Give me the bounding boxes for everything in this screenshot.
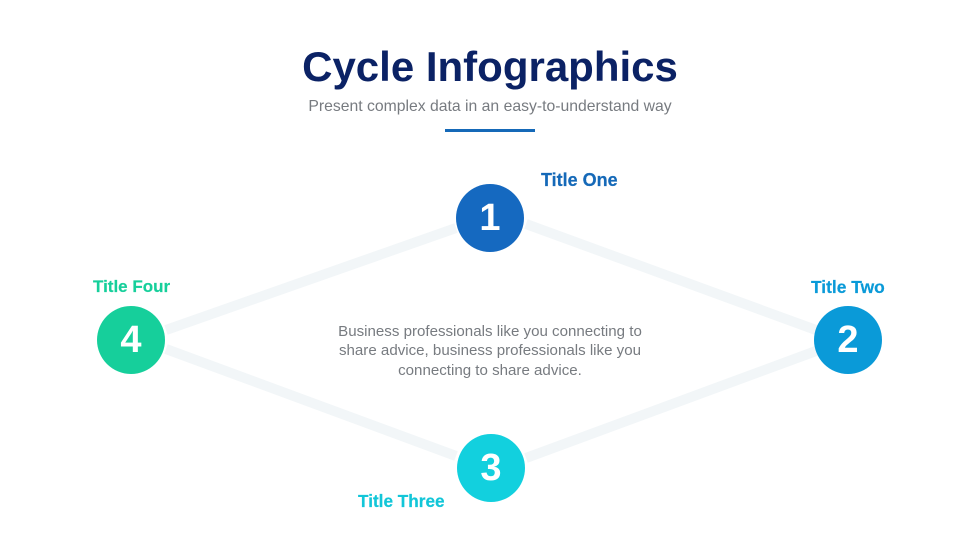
step 4 title: Title Four [93, 277, 170, 296]
step 3 title: Title Three [358, 491, 445, 511]
step 2 circle [814, 306, 882, 374]
step 2 title: Title Two [811, 277, 885, 297]
step 3 circle: 3 [480, 447, 502, 489]
step 3 circle [457, 434, 525, 502]
step 4 circle: 4 [120, 319, 142, 361]
title: Cycle Infographics [302, 42, 678, 90]
step 2 circle: 2 [837, 319, 859, 361]
step 1 circle: 1 [479, 197, 501, 239]
step 1 circle [456, 184, 524, 252]
center description text [338, 322, 642, 378]
step 4 circle [97, 306, 165, 374]
center description text: share advice, business professionals like you [339, 342, 641, 359]
step 1 title: Title One [541, 170, 618, 190]
subtitle: Present complex data in an easy-to-understand way [308, 98, 672, 115]
center description text: connecting to share advice. [398, 362, 582, 378]
center description text: Business professionals like you connecting to [338, 322, 642, 340]
title underline [445, 129, 535, 132]
